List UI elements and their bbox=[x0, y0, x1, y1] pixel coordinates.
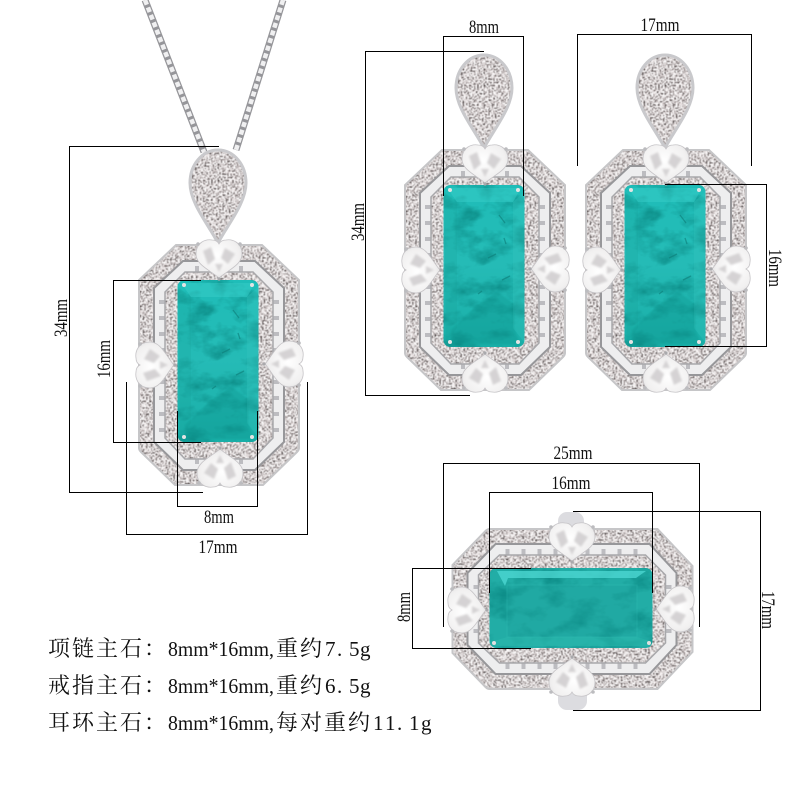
16mm bracket bbox=[114, 280, 201, 442]
pendant centre stone bbox=[178, 280, 258, 442]
earring bail bbox=[456, 55, 512, 148]
label 16mm ring: 16mm bbox=[552, 473, 591, 494]
label 25mm ring: 25mm bbox=[554, 443, 593, 464]
ring band bbox=[558, 512, 587, 710]
8mm bracket bbox=[444, 36, 524, 196]
label 8mm ring: 8mm bbox=[394, 592, 415, 622]
earring stone bbox=[444, 185, 524, 347]
label 17mm earring: 17mm bbox=[640, 15, 680, 36]
chain bbox=[145, 0, 283, 152]
earring frame bbox=[586, 150, 746, 390]
label 17mm ring: 17mm bbox=[757, 591, 778, 629]
8mm bracket bbox=[412, 568, 531, 648]
17mm bracket bbox=[126, 382, 308, 534]
label 8mm pendant: 8mm bbox=[204, 507, 234, 528]
line: earrings: 8mm*16mm, bbox=[168, 711, 274, 735]
line: earrings: 耳环主石： bbox=[48, 706, 166, 737]
ring diamonds bbox=[448, 523, 694, 696]
line: necklace bbox=[48, 632, 371, 663]
line: ring: 重约 bbox=[276, 669, 322, 700]
specification text bbox=[48, 632, 432, 737]
label 34mm pendant: 34mm bbox=[51, 299, 72, 337]
pendant bail bbox=[190, 150, 246, 243]
line: earrings: 每对重约 bbox=[276, 706, 370, 737]
line: necklace: 项链主石： bbox=[48, 632, 166, 663]
line: ring: 6.5g bbox=[325, 674, 371, 698]
line: necklace: 重约 bbox=[276, 632, 322, 663]
line: earrings: 11.1g bbox=[373, 711, 432, 735]
line: ring: 戒指主石： bbox=[48, 669, 166, 700]
pendant frame bbox=[139, 245, 299, 485]
label 16mm pendant: 16mm bbox=[94, 340, 115, 378]
pendant diamonds bbox=[136, 240, 303, 487]
earring stone bbox=[624, 185, 706, 347]
earring left bbox=[402, 55, 569, 392]
ring bbox=[448, 512, 694, 710]
17mm bracket bbox=[573, 512, 760, 710]
16mm bracket bbox=[665, 184, 766, 346]
dimension lines: ring bbox=[412, 464, 760, 710]
label 17mm pendant: 17mm bbox=[198, 537, 238, 558]
8mm bracket bbox=[178, 411, 258, 506]
earring bail bbox=[637, 55, 693, 148]
ring frame bbox=[452, 529, 692, 689]
necklace pendant bbox=[136, 0, 303, 487]
dimension lines: earrings bbox=[366, 34, 766, 396]
label 16mm earring: 16mm bbox=[764, 249, 785, 287]
34mm bracket bbox=[70, 146, 219, 492]
34mm bracket bbox=[366, 52, 484, 396]
line: earrings bbox=[48, 706, 432, 737]
line: necklace: 8mm*16mm, bbox=[168, 637, 274, 661]
17mm bracket bbox=[578, 34, 752, 166]
label 34mm earring: 34mm bbox=[348, 203, 369, 241]
line: ring bbox=[48, 669, 371, 700]
dimension lines: pendant bbox=[70, 146, 308, 534]
25mm bracket bbox=[444, 464, 700, 627]
dimension labels bbox=[51, 15, 785, 629]
earring diamonds bbox=[402, 145, 569, 392]
line: ring: 8mm*16mm, bbox=[168, 674, 274, 698]
earring diamonds bbox=[583, 145, 750, 392]
label 8mm earring: 8mm bbox=[469, 17, 499, 38]
16mm bracket bbox=[490, 492, 652, 593]
earring frame bbox=[405, 150, 565, 390]
line: necklace: 7.5g bbox=[325, 637, 371, 661]
ring stone bbox=[490, 568, 652, 648]
earring right bbox=[583, 55, 750, 392]
